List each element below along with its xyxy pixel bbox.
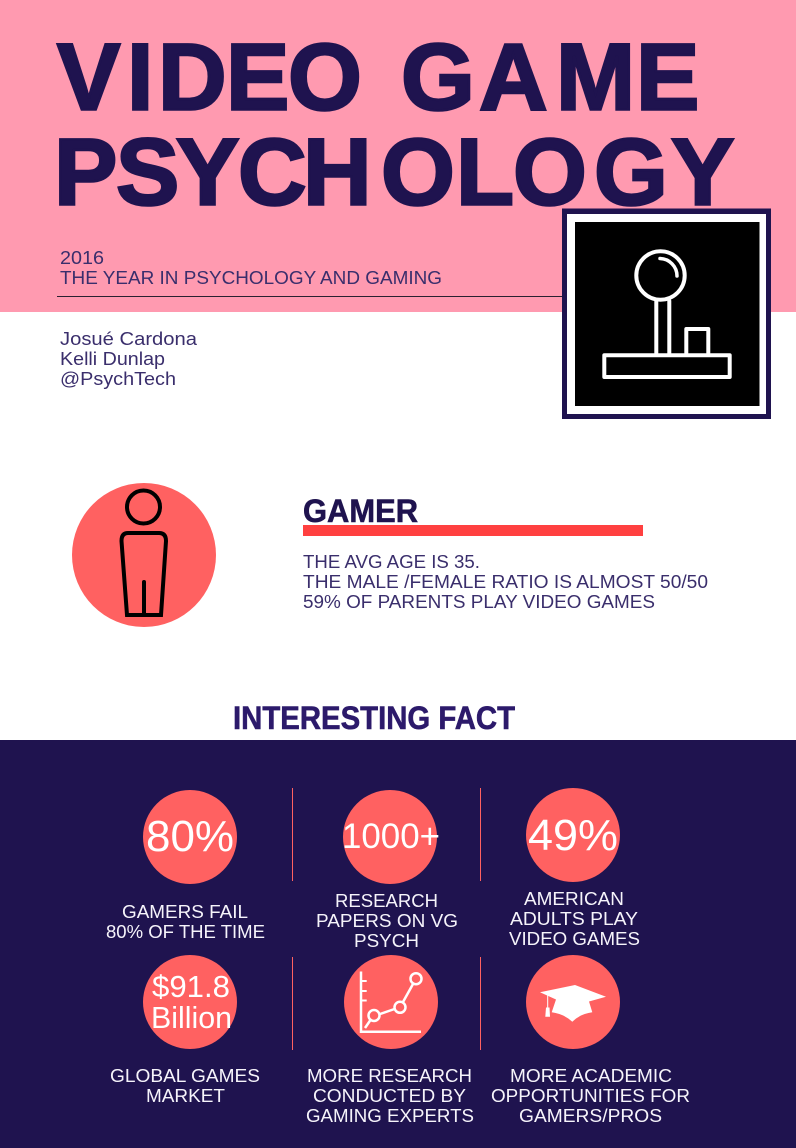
fact: global games market xyxy=(110,955,260,1106)
fact: 1000+: RESEARCH xyxy=(335,890,438,911)
authors xyxy=(60,328,198,389)
fact: academic opportunities: MORE ACADEMIC xyxy=(510,1065,672,1086)
fact: global games market: Billion xyxy=(151,1001,232,1035)
fact: 49%: 49% xyxy=(528,811,618,860)
heading underline bar xyxy=(303,525,643,536)
fact: academic opportunities: GAMERS/PROS xyxy=(519,1105,662,1126)
fact: global games market: MARKET xyxy=(146,1085,225,1106)
text block: gamer facts xyxy=(303,551,708,612)
fact: 1000+: PSYCH xyxy=(354,930,419,951)
fact: more research by experts xyxy=(306,955,474,1126)
text block: gamer facts: 59% OF PARENTS PLAY VIDEO GAMES xyxy=(303,591,655,612)
authors: Kelli Dunlap xyxy=(60,348,165,369)
icon: graduation cap xyxy=(540,985,606,1022)
fact: more research by experts: GAMING EXPERTS xyxy=(306,1105,474,1126)
fact: 1000+ xyxy=(316,790,458,951)
title: PSYCHOLOGY xyxy=(54,120,734,226)
fact: more research by experts: CONDUCTED BY xyxy=(313,1085,466,1106)
fact: 49%: VIDEO GAMES xyxy=(509,928,640,949)
fact: 49%: ADULTS PLAY xyxy=(510,908,638,929)
subtitle: THE YEAR IN PSYCHOLOGY AND GAMING xyxy=(60,267,442,288)
text block: gamer facts: THE MALE /FEMALE RATIO IS ALMOST 50/50 xyxy=(303,571,708,592)
authors: Josué Cardona xyxy=(60,328,198,349)
fact: 80%: GAMERS FAIL xyxy=(122,901,248,922)
fact: academic opportunities: OPPORTUNITIES FOR xyxy=(491,1085,690,1106)
fact: 1000+: PAPERS ON VG xyxy=(316,910,458,931)
subtitle xyxy=(60,247,442,288)
title xyxy=(54,25,734,226)
fact: 80% xyxy=(106,790,265,942)
fact: 80%: 80% OF THE TIME xyxy=(106,921,265,942)
text block: gamer facts: THE AVG AGE IS 35. xyxy=(303,551,480,572)
fact: global games market: GLOBAL GAMES xyxy=(110,1065,260,1086)
icon: line chart xyxy=(361,972,422,1032)
fact: 49%: AMERICAN xyxy=(524,888,624,909)
fact: 49% xyxy=(509,788,640,949)
authors: @PsychTech xyxy=(60,368,176,389)
subtitle: 2016 xyxy=(60,247,104,268)
fact: academic opportunities xyxy=(491,955,690,1126)
title: VIDEO GAME xyxy=(57,25,699,131)
icon: joystick xyxy=(562,208,771,419)
fact: more research by experts: MORE RESEARCH xyxy=(307,1065,472,1086)
fact: global games market: $91.8 xyxy=(152,969,230,1004)
heading: gamer: GAMER xyxy=(303,493,418,529)
panel: facts xyxy=(0,740,796,1148)
panel: pink header xyxy=(0,0,796,312)
icon: gamer person xyxy=(72,483,216,627)
fact: 80%: 80% xyxy=(146,812,234,861)
fact: 1000+: 1000+ xyxy=(342,817,440,856)
heading: interesting fact: INTERESTING FACT xyxy=(233,700,515,736)
